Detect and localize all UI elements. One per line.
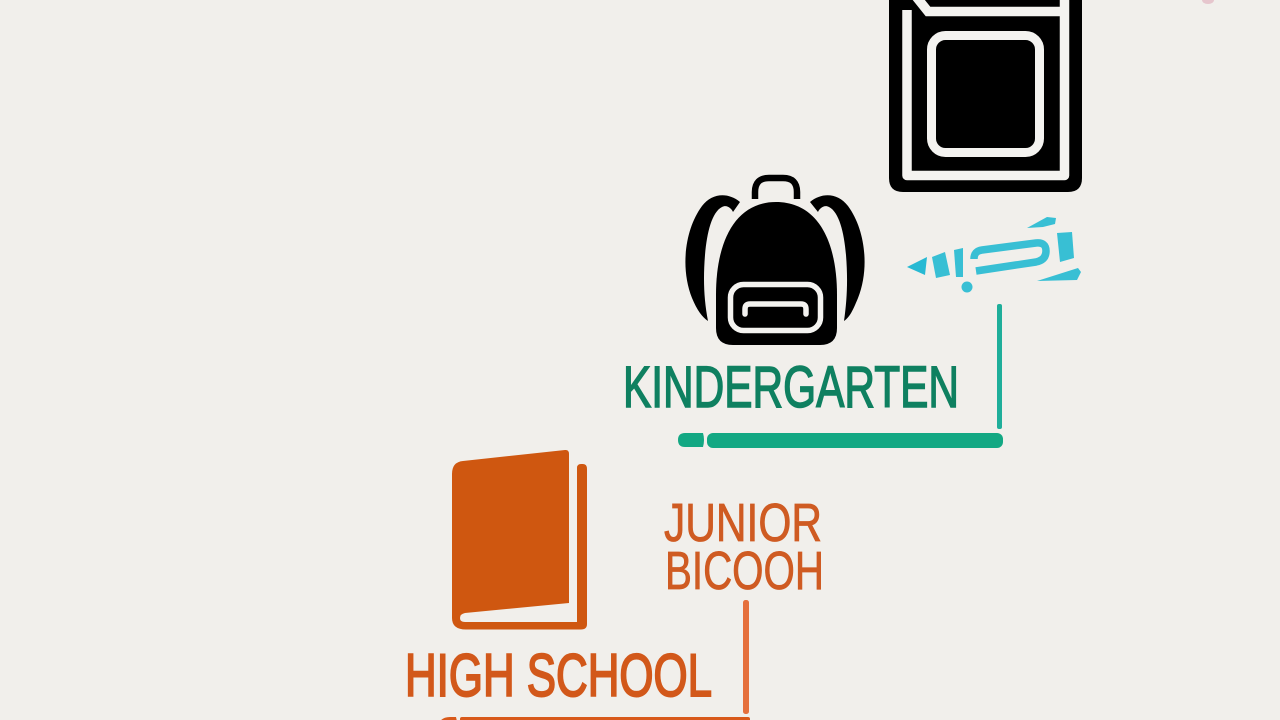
- connector: junior school vertical line: [743, 600, 749, 714]
- backpack right strap: [810, 195, 865, 321]
- icon: backpack: [685, 178, 865, 345]
- label: junior school: [664, 493, 824, 601]
- connector: kindergarten horizontal bar: [678, 433, 1003, 448]
- connector: high school horizontal bar: [438, 717, 750, 720]
- icon: orange book: [452, 450, 587, 630]
- label: junior school: BICOOH: [665, 541, 824, 601]
- backpack top handle: [755, 178, 797, 199]
- title: high school: HIGH SCHOOL: [405, 642, 712, 709]
- label: junior school: JUNIOR: [664, 493, 822, 553]
- backpack left strap: [685, 195, 740, 321]
- icon: crayon: [907, 217, 1081, 292]
- connector: kindergarten vertical line: [997, 304, 1002, 429]
- backpack pocket handle: [745, 304, 806, 314]
- backpack body: [716, 202, 837, 345]
- icon: black notebook: [889, 0, 1082, 192]
- backpack pocket: [730, 284, 820, 330]
- title: kindergarten: KINDERGARTEN: [623, 355, 959, 420]
